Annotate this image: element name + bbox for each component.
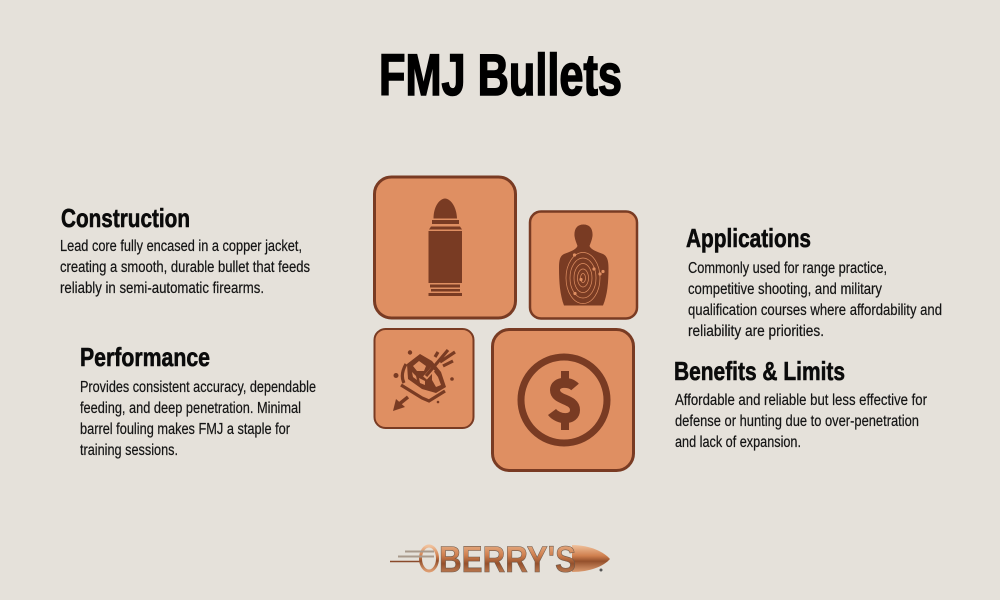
text block: construction: creating a smooth, durable bullet that feeds	[60, 259, 310, 276]
text block: performance: training sessions.	[80, 442, 178, 459]
logo: Berry's bullet: BERRY'S	[439, 539, 576, 580]
panel: dollar icon	[492, 330, 634, 470]
text block: applications: reliability are priorities.	[688, 323, 824, 340]
title: FMJ Bullets	[379, 43, 622, 108]
text block: benefits and limits	[674, 356, 927, 451]
icon: dollar coin	[521, 357, 607, 443]
icon: impact with arrow	[393, 350, 455, 411]
text block: performance: Provides consistent accuracy, dependable	[80, 379, 316, 396]
icon: bullet	[428, 198, 462, 296]
text block: benefits and limits: and lack of expansion.	[675, 434, 801, 451]
text block: applications: competitive shooting, and military	[688, 281, 882, 298]
panel: bullet icon	[374, 177, 516, 318]
text block: performance: Performance	[80, 342, 210, 372]
text block: applications: Commonly used for range practice,	[688, 260, 887, 277]
icon: shooting target silhouette	[559, 224, 608, 306]
text block: benefits and limits: Benefits & Limits	[674, 356, 845, 386]
text block: applications: Applications	[686, 223, 811, 253]
text block: construction	[60, 203, 310, 297]
text block: applications	[686, 223, 942, 340]
text block: performance: barrel fouling makes FMJ a staple for	[80, 421, 290, 438]
text block: benefits and limits: defense or hunting due to over-penetration	[675, 413, 919, 430]
text block: performance	[80, 342, 316, 459]
panel: target icon	[530, 212, 637, 318]
text block: applications: qualification courses where affordability and	[688, 302, 942, 319]
text block: construction: reliably in semi-automatic firearms.	[60, 280, 264, 297]
text block: performance: feeding, and deep penetration. Minimal	[80, 400, 301, 417]
panel: penetration icon	[374, 329, 474, 428]
text block: construction: Lead core fully encased in a copper jacket,	[60, 238, 302, 255]
text block: construction: Construction	[61, 203, 190, 233]
text block: benefits and limits: Affordable and reliable but less effective for	[675, 392, 927, 409]
